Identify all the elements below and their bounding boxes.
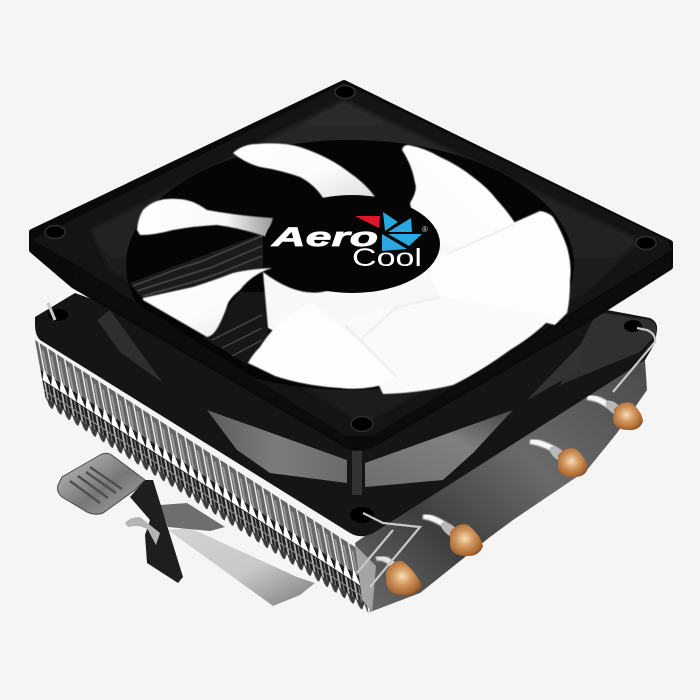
fan blades: [137, 143, 571, 394]
product illustration: AeroCool CPU cooler: [29, 80, 673, 614]
logo word Aero: Aero: [270, 222, 378, 252]
registered mark: ®: [422, 225, 428, 234]
blade lower right: [345, 297, 552, 394]
blade bottom: [248, 303, 397, 389]
blade base under hub: [263, 220, 450, 350]
top fan frame face: [32, 83, 672, 436]
logo word Cool: Cool: [352, 244, 422, 272]
fan opening: [126, 140, 574, 390]
front frame bars: [73, 255, 670, 447]
left clip handle: [58, 453, 145, 514]
heatsink right side plate: [355, 360, 647, 612]
blade top: [233, 143, 375, 198]
blade overlap shading: [345, 224, 515, 377]
raised inner panel of frame: [90, 100, 640, 425]
blade left: [137, 199, 273, 237]
top fan frame side band: [32, 83, 670, 448]
copper heat pipe tips: [386, 398, 643, 595]
heatsink fin stack: [35, 340, 369, 616]
frame screw holes: [45, 86, 656, 432]
left clip arm: [125, 480, 183, 583]
fan hub with logo: [264, 195, 440, 293]
lower fan frame and fan body: [35, 293, 657, 536]
left retention clip base bar: [160, 503, 315, 606]
heatsink seen through the fan: [130, 233, 268, 365]
logo mark: [355, 212, 422, 251]
blade lower left: [143, 268, 272, 337]
blade right: [425, 211, 571, 325]
wire clips: [48, 303, 655, 587]
blade top right: [402, 145, 515, 256]
